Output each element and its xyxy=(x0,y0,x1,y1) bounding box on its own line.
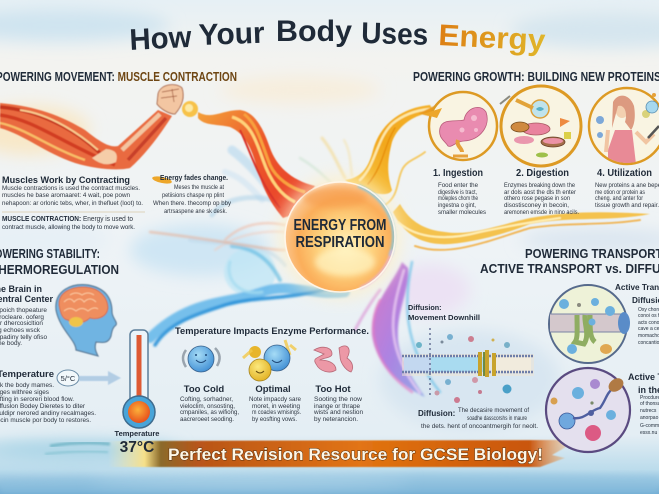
too cold text: aacreroeet seoding. xyxy=(180,416,234,423)
step 1 text: ingestna o gint, xyxy=(438,202,476,209)
pale wisps around the orb xyxy=(215,138,352,250)
too cold text: vieloclim, onsosting, xyxy=(180,403,235,410)
text: muscles work by contracting xyxy=(2,175,143,207)
callout: muscle contraction definition xyxy=(2,212,145,231)
too hot text: Too Hot xyxy=(315,384,351,395)
too hot text: inange or thrape xyxy=(314,403,360,410)
text: active transport in the cell: nutrecs xyxy=(640,408,657,414)
step 2 text: disostisconey in becoin, xyxy=(504,202,569,209)
label: temperature 37 C xyxy=(115,429,159,456)
step 2 text: Enzymes breaking down the xyxy=(504,182,575,189)
optimal text: Optimal xyxy=(255,384,291,395)
text: diffusion definition: The decasire movement of xyxy=(458,407,529,414)
optimal text: moret, in weeting xyxy=(252,403,300,410)
icon: too hot enzyme xyxy=(314,346,353,372)
icon: flexed muscular arm xyxy=(0,85,183,169)
diffusion label xyxy=(408,303,480,322)
title: Uses xyxy=(361,17,429,52)
step 1 text: Food enter the xyxy=(438,182,478,189)
step 1 text: 1. Ingestion xyxy=(433,167,483,179)
title: Energy xyxy=(438,19,547,58)
panel: enzyme performance xyxy=(175,326,369,423)
energy streams from the central orb xyxy=(150,101,650,397)
icon: small energy spark xyxy=(152,175,172,185)
text: energy fades change xyxy=(153,175,232,215)
text: muscles work by contracting: nehapoon: ar orlonic tebs, wher, in thefluet (loot) to. xyxy=(2,200,143,207)
optimal text xyxy=(249,384,301,423)
diffusion label: Diffusion: xyxy=(408,303,442,312)
step 1 text xyxy=(433,167,486,216)
panel: powering growth xyxy=(413,69,659,216)
gold stream to growth xyxy=(345,105,650,250)
step 3 text: me otion or protein as xyxy=(595,189,645,196)
central orb xyxy=(278,175,402,299)
step 2 text: aremonen emsde in nino acils. xyxy=(504,209,579,216)
panel: powering movement xyxy=(0,69,237,231)
step 1 text: smaller molecules xyxy=(438,209,486,216)
icon: temperature bubble xyxy=(57,370,79,386)
icon: active transport cell xyxy=(549,285,630,363)
text: diffusion definition: the dets. hent of oncoantmergih for neolt. xyxy=(421,423,538,430)
icon: thermometer xyxy=(123,330,155,428)
icon: ingestion stomach xyxy=(423,92,497,160)
too cold text: cmpaniles, as wifiong, xyxy=(180,409,239,416)
icon: optimal enzymes xyxy=(243,340,296,381)
text: muscles work by contracting: Muscles Work by Contracting xyxy=(2,175,130,186)
too hot text: Sooting the now xyxy=(314,396,362,403)
purple stream downward xyxy=(355,262,440,397)
text: diffusion definition: Diffusion: xyxy=(418,409,455,418)
too cold text: Too Cold xyxy=(184,384,224,395)
central orb: RESPIRATION xyxy=(296,234,384,251)
title: How xyxy=(129,21,193,57)
optimal text: by eosfting vows. xyxy=(252,416,297,423)
text: muscles work by contracting: muscles he base aromaaret: 4 wait, poe pown xyxy=(2,192,130,199)
too cold text xyxy=(180,384,239,423)
title: Body xyxy=(276,15,352,48)
optimal text: Note impacdy sare xyxy=(249,396,301,403)
callout: muscle contraction definition: contract muscle, allowing the body to move work. xyxy=(2,224,135,231)
step 2 text: othero rose pegase in son xyxy=(504,195,570,202)
too cold text: Cofting, sorhadner, xyxy=(180,396,233,403)
callout: muscle contraction definition: MUSCLE CONTRACTION: Energy is used to xyxy=(2,214,133,223)
text: active transport in the cell: anorpao xyxy=(640,415,659,421)
text: active transport in the cell xyxy=(628,372,659,436)
icon: head with brain xyxy=(56,285,116,356)
optimal text: m coacles wmisings. xyxy=(252,409,301,416)
text: the brain in central center xyxy=(0,284,53,347)
heading: movement: POWERING MOVEMENT: MUSCLE CONTRACTION xyxy=(0,69,237,84)
panel: powering stability xyxy=(0,246,369,456)
text: muscles work by contracting: Muscle contractions is used the contract muscles. xyxy=(2,185,140,192)
diffusion label: Movement Downhill xyxy=(408,313,480,322)
text: energy fades change: petiisions chaspe np plint xyxy=(162,192,224,199)
step 3 text: cheng. and anter for xyxy=(595,195,644,202)
step 3 text xyxy=(595,167,659,209)
panel: powering transport xyxy=(402,246,659,452)
text: energy fades change: When there. thecomp op bby xyxy=(153,200,232,207)
title xyxy=(129,15,547,58)
red stream to the arm xyxy=(182,101,315,218)
text: energy fades change: Meses the muscle at xyxy=(174,184,224,191)
label: temperature 37 C: Temperature xyxy=(115,429,159,438)
icon: active transport vesicle xyxy=(546,368,630,452)
label: temperature 37 C: 37°C xyxy=(120,439,154,456)
too hot text xyxy=(313,384,363,423)
icon: too cold enzyme xyxy=(183,346,220,372)
icon: digestion enzymes xyxy=(500,86,581,166)
step 1 text: digestive is tract, xyxy=(438,189,477,196)
step 2 text: 2. Digestion xyxy=(516,167,569,179)
diagram: diffusion membrane xyxy=(402,328,534,403)
text: energy fades change: artrsaspene ane sk desk. xyxy=(164,208,227,215)
icon: utilization figure xyxy=(589,88,659,164)
text: energy fades change: Energy fades change. xyxy=(160,175,228,182)
text: diffusion definition: soadhe dasscorshs in maure xyxy=(467,415,527,422)
too hot text: wists and nestion xyxy=(313,409,363,416)
heading: enzymes: Temperature Impacts Enzyme Performance. xyxy=(175,326,369,337)
step 1 text: moleples chom the xyxy=(438,195,478,202)
banner: revision resource: Perfect Revision Resource for GCSE Biology! xyxy=(168,445,543,464)
text: active transport in the cell: essx.nu xyxy=(640,430,657,436)
blue stream to the left xyxy=(150,198,345,345)
step 3 text: 4. Utilization xyxy=(597,167,652,179)
too hot text: by neterancion. xyxy=(314,416,358,423)
step 2 text: ar dols aost the dls th enter xyxy=(504,189,577,196)
orb title: ENERGY FROM xyxy=(294,217,386,234)
icon: temperature bubble: 5/°C xyxy=(61,374,76,383)
banner: revision resource xyxy=(108,440,566,467)
step 2 text xyxy=(504,167,579,216)
text: temperature xyxy=(0,369,96,424)
text: active transport diffusion xyxy=(615,283,659,346)
title: Your xyxy=(198,17,266,52)
arrow to thermometer xyxy=(79,371,121,385)
text: diffusion definition xyxy=(418,407,538,430)
